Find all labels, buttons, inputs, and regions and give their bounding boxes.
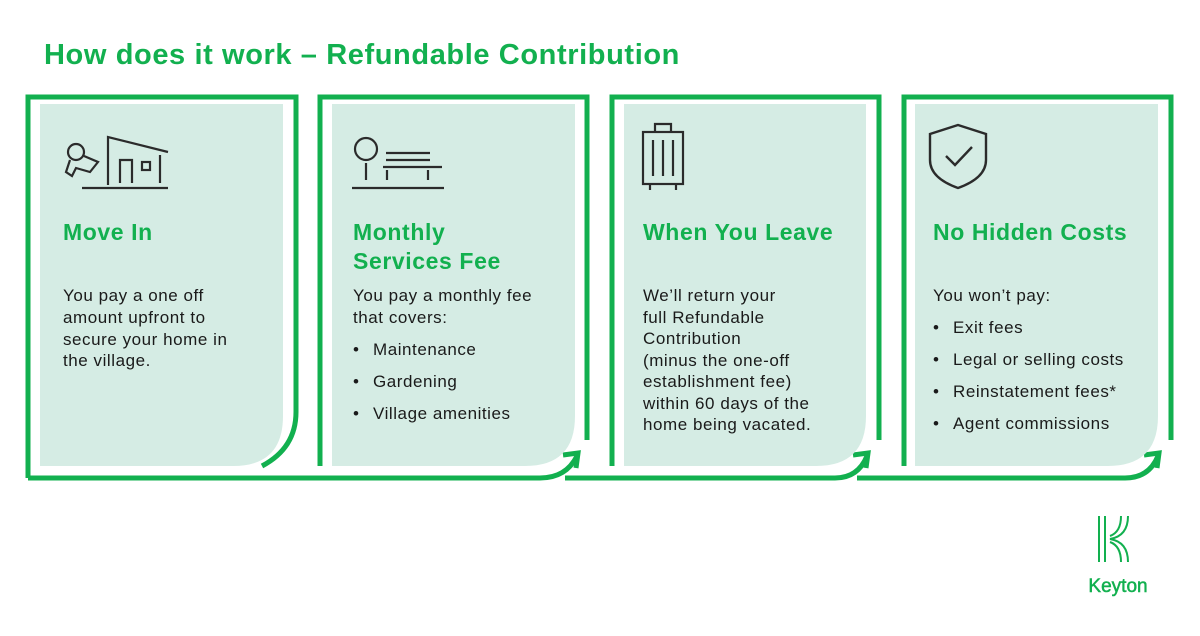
text: monthly fee: You pay a monthly fee (353, 286, 532, 305)
text: move in: amount upfront to (63, 308, 206, 327)
text: when you leave: We’ll return your (643, 286, 776, 305)
text: when you leave: (minus the one-off (643, 351, 790, 370)
text: no hidden costs: Legal or selling costs (953, 350, 1124, 369)
text: no hidden costs: • (933, 350, 940, 369)
arrow: connector 3 (857, 453, 1159, 478)
text: no hidden costs: Reinstatement fees* (953, 382, 1117, 401)
text: monthly fee: • (353, 372, 360, 391)
icon: suitcase (643, 124, 683, 190)
arrow: connector 2 (565, 453, 868, 478)
text: when you leave: full Refundable (643, 308, 765, 327)
text: move in: You pay a one off (63, 286, 204, 305)
text: monthly fee: Gardening (373, 372, 457, 391)
text: move in: secure your home in (63, 330, 227, 349)
heading: monthly services fee: Services Fee (353, 248, 501, 274)
text: move in: the village. (63, 351, 151, 370)
panel: monthly services fee (320, 97, 587, 466)
heading: when you leave: When You Leave (643, 219, 833, 245)
text: no hidden costs: • (933, 318, 940, 337)
text: monthly fee: Village amenities (373, 404, 511, 423)
text: no hidden costs: • (933, 382, 940, 401)
heading: monthly services fee: Monthly (353, 219, 445, 245)
text: monthly fee: that covers: (353, 308, 447, 327)
text: when you leave: home being vacated. (643, 415, 811, 434)
panel: no hidden costs (904, 97, 1171, 466)
icon: shield check (930, 125, 986, 188)
text: monthly fee: Maintenance (373, 340, 476, 359)
panel: when you leave (612, 97, 879, 466)
text: when you leave: Contribution (643, 329, 741, 348)
logo: Keyton: Keyton (1088, 576, 1148, 597)
text: no hidden costs: Agent commissions (953, 414, 1110, 433)
heading: no hidden costs: No Hidden Costs (933, 219, 1127, 245)
arrow: connector 1 (28, 453, 578, 478)
text: monthly fee: • (353, 404, 360, 423)
title: How does it work – Refundable Contribution (44, 39, 680, 71)
panel: move in (28, 97, 296, 478)
icon: key and house (66, 137, 168, 188)
text: monthly fee: • (353, 340, 360, 359)
logo: Keyton (1088, 516, 1148, 597)
icon: tree and bench (352, 138, 444, 188)
text: no hidden costs: • (933, 414, 940, 433)
heading: move in: Move In (63, 219, 153, 245)
text: no hidden costs: You won’t pay: (933, 286, 1051, 305)
text: no hidden costs: Exit fees (953, 318, 1023, 337)
text: when you leave: establishment fee) (643, 372, 792, 391)
text: when you leave: within 60 days of the (642, 394, 810, 413)
